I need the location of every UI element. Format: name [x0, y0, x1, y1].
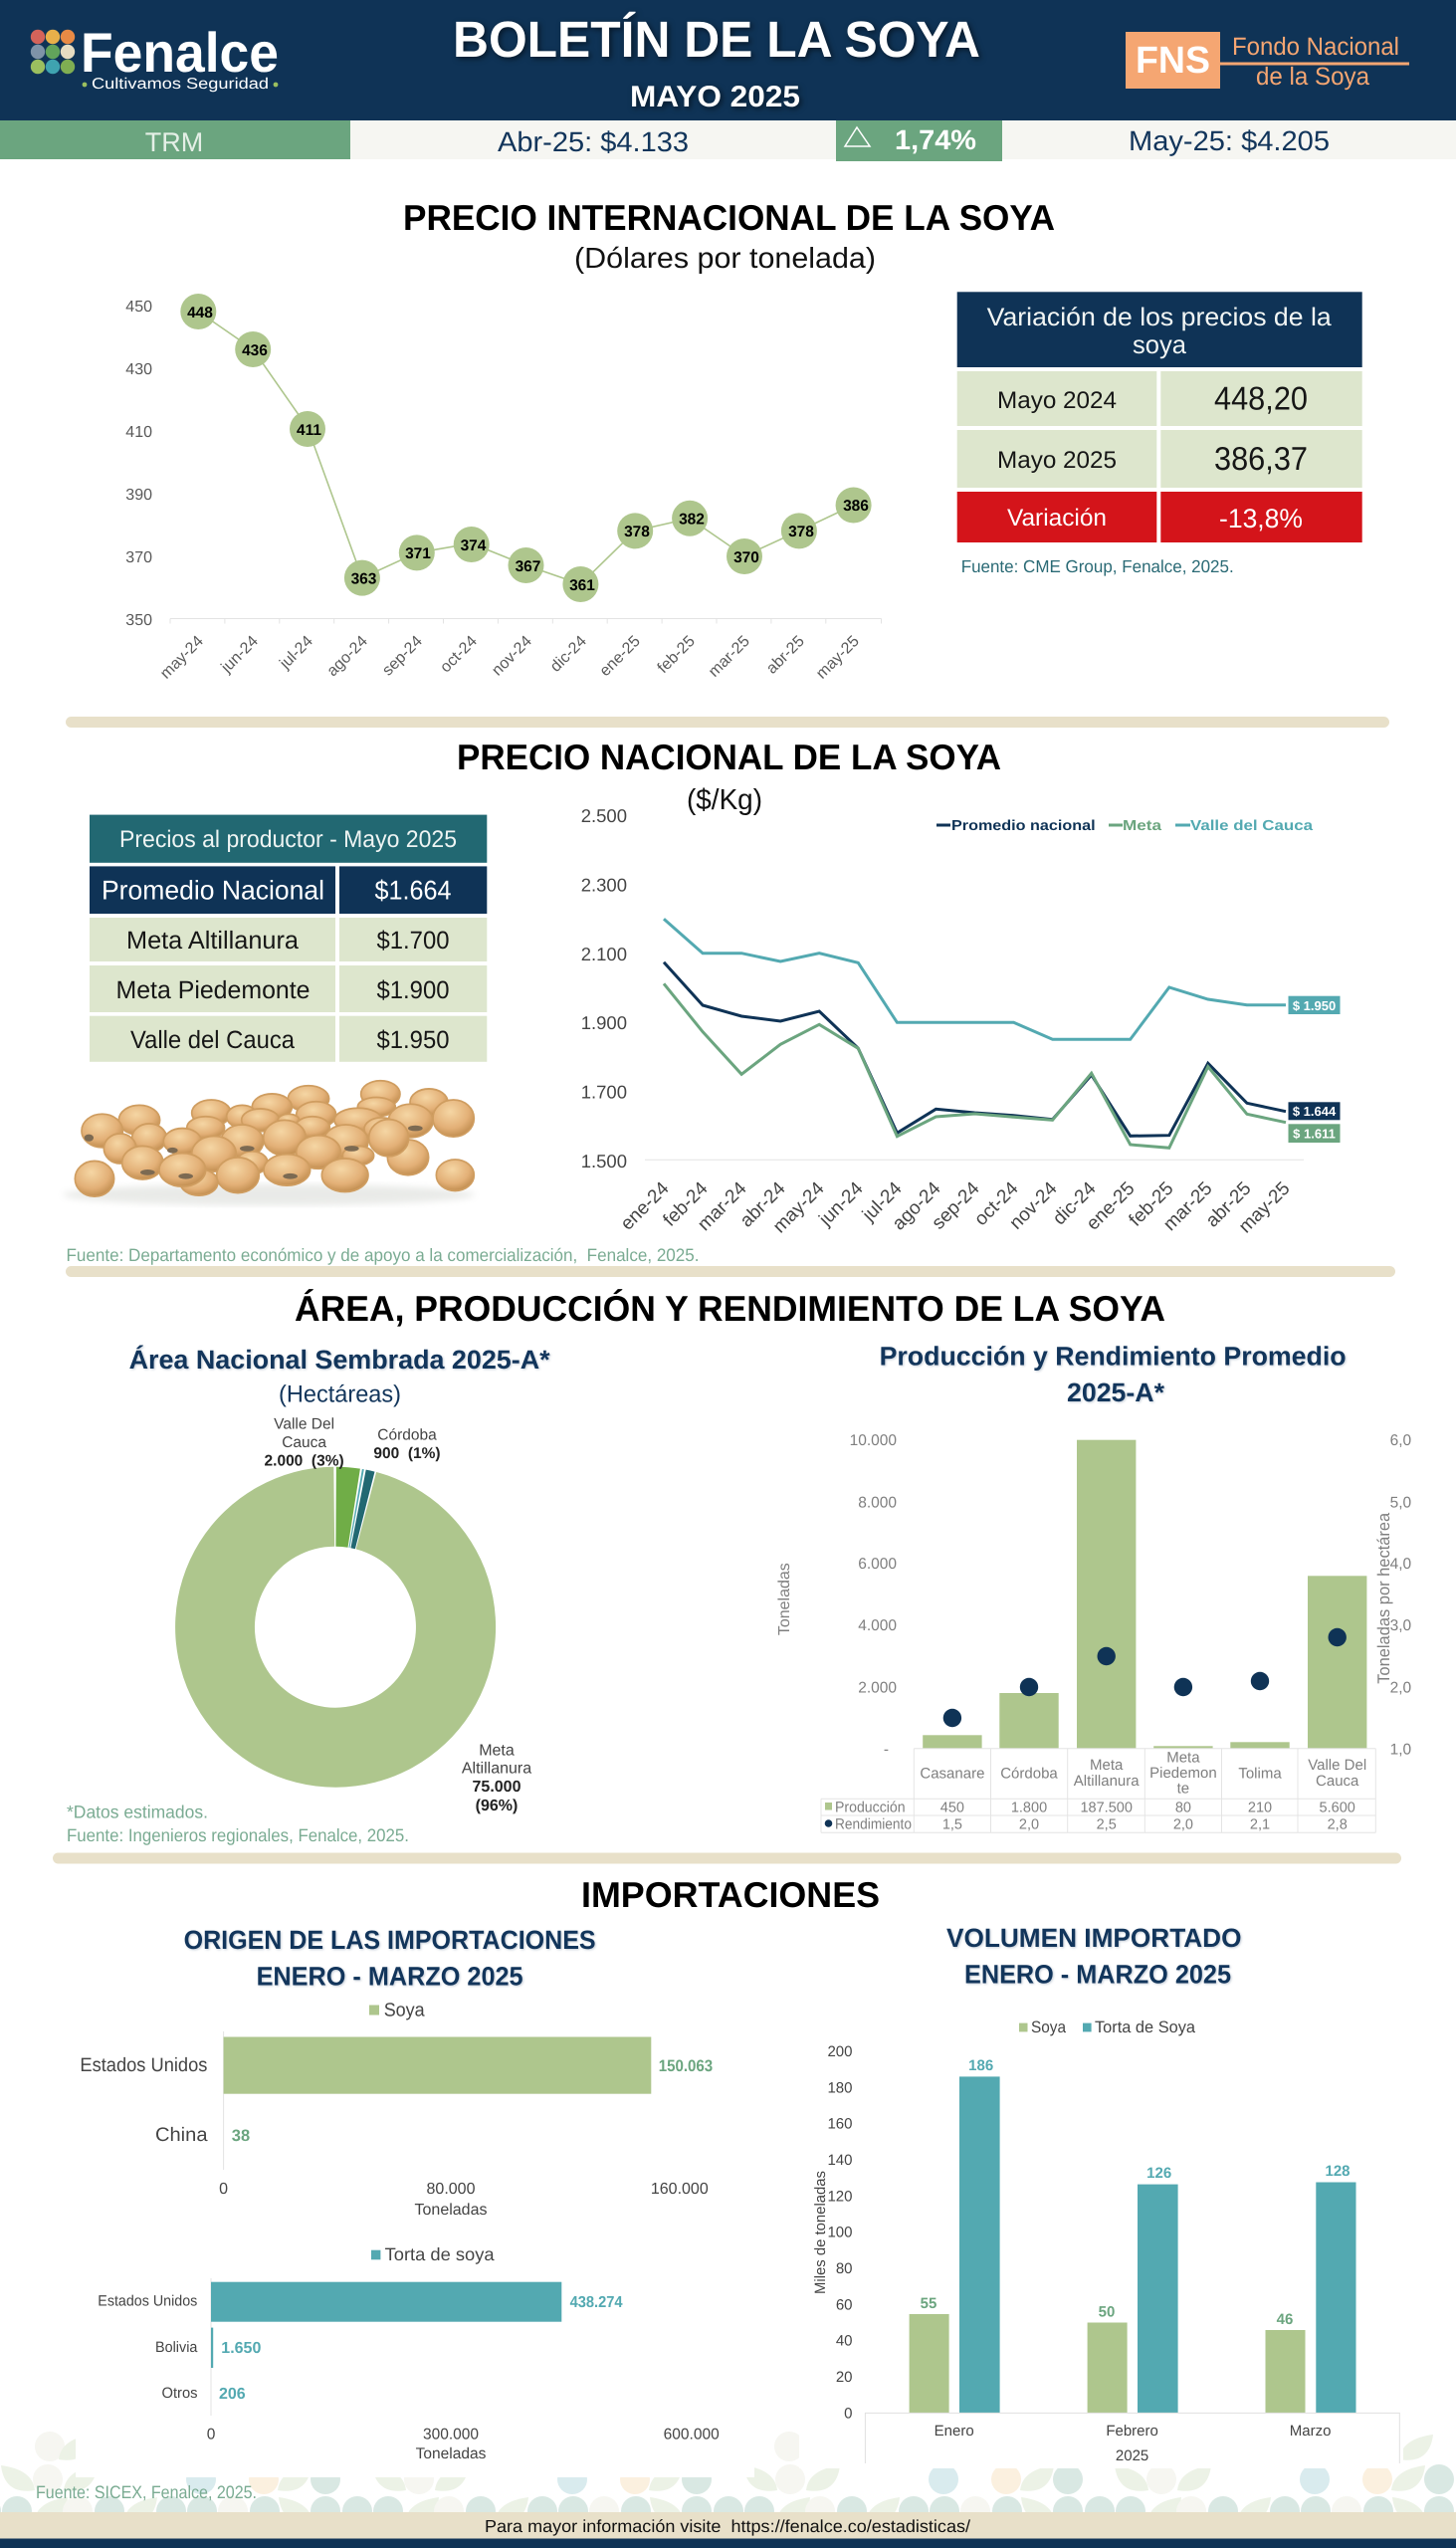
legend: Soya — [1031, 2018, 1067, 2036]
data labels — [187, 305, 869, 594]
heading: planted area: Área Nacional Sembrada 2025-A* — [129, 1345, 550, 1375]
value labels: 46 — [1277, 2311, 1293, 2328]
data table: Meta — [1090, 1757, 1124, 1774]
y axis labels: 180 — [827, 2079, 852, 2096]
value labels: 186 — [968, 2057, 993, 2074]
y axis labels: 350 — [125, 612, 152, 629]
table rows — [997, 380, 1308, 533]
segment: other — [348, 1469, 364, 1548]
series: Promedio nacional — [664, 962, 1286, 1136]
TRM label: TRM — [145, 127, 203, 157]
category labels: Marzo — [1290, 2423, 1331, 2440]
heading: production and yield — [880, 1342, 1347, 1407]
y axis labels: 200 — [827, 2043, 852, 2060]
x axis labels: abr-25 — [763, 633, 808, 678]
segment: Cordoba — [350, 1470, 374, 1549]
category labels: Bolivia — [155, 2339, 198, 2356]
category labels: Otros — [161, 2385, 197, 2402]
logo: Fenalce — [31, 21, 279, 93]
source: department: Fuente: Departamento económico y de apoyo a la comercialización, Fenalce, 2025. — [66, 1245, 699, 1265]
data table: 210 — [1248, 1800, 1272, 1815]
line chart: international price — [125, 294, 882, 683]
y axis labels: 430 — [125, 361, 152, 378]
x axis labels: jul-24 — [858, 1177, 907, 1226]
bar: Bolivia — [211, 2328, 213, 2368]
axis labels: Toneladas — [416, 2445, 487, 2462]
axis labels: 300.000 — [423, 2427, 479, 2442]
table: producer prices — [90, 815, 487, 1062]
axis labels: 160.000 — [651, 2181, 709, 2198]
regional rows — [115, 927, 450, 1054]
value tag: Valle del Cauca: $ 1.950 — [1293, 998, 1336, 1013]
value tag: promedio: $ 1.644 — [1293, 1104, 1337, 1119]
y axis labels: 2.100 — [581, 944, 627, 964]
data table: 2,0 — [1019, 1817, 1039, 1833]
axis labels: 80.000 — [427, 2181, 476, 2198]
table: price variation — [957, 292, 1362, 542]
table rows: Variación — [1007, 505, 1107, 531]
x axis labels: ago-24 — [889, 1177, 945, 1234]
value labels: 150.063 — [659, 2057, 713, 2075]
y axis labels: 20 — [836, 2369, 852, 2386]
data labels: 371 — [405, 545, 431, 562]
right axis labels: 4,0 — [1390, 1556, 1412, 1573]
notes: estimated data and source — [67, 1802, 409, 1845]
x axis labels: nov-24 — [489, 633, 535, 679]
axis labels: 0 — [219, 2181, 228, 2198]
legend: Soya — [384, 2000, 425, 2020]
table rows: 448,20 — [1214, 380, 1308, 417]
y axis labels: 0 — [844, 2405, 852, 2423]
data labels: 382 — [679, 512, 705, 528]
x axis labels: jul-24 — [276, 633, 316, 673]
TRM band — [0, 120, 1456, 161]
y axis labels: 410 — [125, 424, 152, 441]
data table: 1,5 — [942, 1817, 962, 1833]
left axis labels — [850, 1432, 897, 1758]
data table: 2,5 — [1097, 1817, 1117, 1833]
x axis labels: abr-25 — [1202, 1178, 1256, 1231]
table header — [987, 304, 1333, 359]
data labels: 363 — [351, 571, 377, 587]
bar chart: soya origin — [80, 2000, 713, 2219]
table header: Precios al productor - Mayo 2025 — [119, 826, 457, 853]
right axis labels: 2,0 — [1390, 1680, 1412, 1696]
legend — [1019, 2018, 1196, 2036]
y axis labels: 160 — [827, 2116, 852, 2133]
header band — [0, 0, 1456, 120]
regional rows: Meta Piedemonte — [115, 976, 311, 1004]
logo: FNS — [1126, 32, 1409, 91]
label: Cordoba: Córdoba — [377, 1427, 437, 1444]
left axis labels: 8.000 — [858, 1495, 897, 1511]
data table: 80 — [1175, 1800, 1191, 1815]
left axis labels: 6.000 — [858, 1556, 897, 1573]
x axis labels: mar-25 — [706, 633, 753, 681]
x axis labels: dic-24 — [547, 633, 590, 676]
table rows: 386,37 — [1214, 440, 1308, 477]
subheading: units: (Dólares por tonelada) — [574, 243, 876, 275]
series: Valle del Cauca — [664, 919, 1286, 1039]
axis title: tons per hectare: Toneladas por hectárea — [1374, 1512, 1393, 1684]
value labels: 50 — [1099, 2304, 1115, 2321]
y axis labels: 370 — [125, 549, 152, 566]
value labels: 38 — [232, 2127, 250, 2145]
axis labels — [207, 2427, 720, 2462]
data table: 450 — [940, 1800, 964, 1815]
subheading: hectares: (Hectáreas) — [279, 1381, 401, 1408]
heading: area, production and yield: ÁREA, PRODUCCIÓN Y RENDIMIENTO DE LA SOYA — [295, 1288, 1165, 1329]
value labels: 126 — [1146, 2165, 1171, 2182]
data labels: 386 — [843, 498, 869, 515]
logo: Fenalce: Cultivamos Seguridad — [92, 76, 269, 93]
table rows: Mayo 2024 — [997, 387, 1117, 414]
heading: imported volume: VOLUMEN IMPORTADO — [946, 1923, 1242, 1953]
notes: estimated data and source: Fuente: Ingenieros regionales, Fenalce, 2025. — [67, 1825, 409, 1845]
heading: national price: PRECIO NACIONAL DE LA SOYA — [457, 737, 1001, 777]
x axis labels: mar-24 — [694, 1177, 751, 1235]
value tag: promedio — [1288, 1102, 1340, 1120]
data table: Casanare — [920, 1766, 984, 1783]
table rows: -13,8% — [1219, 504, 1303, 533]
y axis labels: 450 — [125, 299, 152, 316]
y axis labels — [125, 299, 152, 629]
subtitle: date: MAYO 2025 — [630, 81, 800, 113]
heading: production and yield: 2025-A* — [1067, 1378, 1165, 1407]
category labels — [98, 2293, 198, 2402]
y axis labels: 80 — [836, 2260, 852, 2277]
legend: Meta — [1123, 818, 1162, 834]
data table: Valle Del — [1308, 1757, 1366, 1774]
category labels: Febrero — [1106, 2423, 1158, 2440]
data table: 187.500 — [1080, 1800, 1133, 1815]
category labels: Enero — [935, 2423, 974, 2440]
label: Meta Altillanura: (96%) — [476, 1798, 518, 1814]
axis title: Miles de toneladas — [812, 2171, 829, 2294]
x axis labels: nov-24 — [1006, 1177, 1062, 1234]
source: CME: Fuente: CME Group, Fenalce, 2025. — [961, 556, 1234, 576]
axis labels: 600.000 — [664, 2427, 720, 2442]
data labels: 367 — [516, 558, 540, 575]
data table: Altillanura — [1074, 1773, 1140, 1790]
heading: imported volume: ENERO - MARZO 2025 — [964, 1960, 1231, 1990]
bar: Estados Unidos — [211, 2282, 561, 2322]
value tag: Meta — [1288, 1124, 1340, 1143]
value tag: Meta: $ 1.611 — [1293, 1127, 1336, 1141]
label: Meta Altillanura: Altillanura — [462, 1761, 531, 1778]
data table: te — [1177, 1781, 1189, 1798]
data table: Córdoba — [1000, 1766, 1058, 1783]
y axis labels: 1.700 — [581, 1082, 627, 1103]
table header: Variación de los precios de la — [987, 304, 1333, 331]
axis labels: Toneladas — [415, 2202, 487, 2219]
heading: imported volume — [946, 1923, 1242, 1990]
regional rows: Valle del Cauca — [130, 1026, 295, 1054]
y axis labels — [827, 2043, 852, 2423]
heading: international price: PRECIO INTERNACIONAL DE LA SOYA — [403, 197, 1055, 238]
x axis labels — [157, 633, 863, 683]
data table: Rendimiento — [835, 1815, 912, 1833]
y axis labels: 60 — [836, 2296, 852, 2313]
data table: Cauca — [1316, 1773, 1359, 1790]
column chart: imported volume — [812, 2018, 1399, 2464]
label: Meta Altillanura: Meta — [479, 1743, 515, 1760]
heading: import origin — [184, 1925, 596, 1992]
data table: Tolima — [1238, 1766, 1282, 1783]
heading: production and yield: Producción y Rendimiento Promedio — [880, 1342, 1347, 1372]
x axis labels: sep-24 — [379, 633, 426, 679]
series: Meta — [664, 983, 1286, 1148]
y axis labels: 140 — [827, 2152, 852, 2169]
data labels: 378 — [624, 524, 650, 540]
category labels: Estados Unidos — [80, 2054, 208, 2076]
x axis labels: feb-25 — [655, 633, 699, 677]
heading: imports: IMPORTACIONES — [581, 1874, 880, 1915]
table rows: Mayo 2025 — [997, 447, 1117, 474]
value labels: 128 — [1325, 2163, 1351, 2180]
value tag: Valle del Cauca — [1288, 996, 1340, 1014]
data table: 2,0 — [1173, 1817, 1193, 1833]
bar: Estados Unidos — [224, 2036, 651, 2094]
category labels: 2025 — [1116, 2447, 1148, 2464]
axis labels: 0 — [207, 2427, 216, 2442]
legend: Torta de Soya — [1095, 2018, 1196, 2036]
logo: FNS: FNS — [1136, 40, 1210, 82]
footer band — [0, 2512, 1456, 2548]
label: Cordoba: 900 (1%) — [373, 1445, 441, 1462]
notes: estimated data and source: *Datos estimados. — [67, 1802, 208, 1821]
data labels: 361 — [569, 577, 595, 594]
x axis labels: jun-24 — [218, 633, 262, 677]
label: Meta Altillanura — [462, 1743, 531, 1814]
right axis labels: 3,0 — [1390, 1617, 1412, 1634]
bars: torta de soya — [959, 2076, 1355, 2413]
legend: Valle del Cauca — [1190, 818, 1314, 834]
x axis labels: abr-24 — [736, 1177, 790, 1231]
logo: FNS: Fondo Nacional — [1232, 33, 1399, 61]
regional rows: $1.900 — [376, 976, 450, 1004]
label: Valle del Cauca: Valle Del — [274, 1415, 334, 1432]
x axis labels: may-24 — [157, 633, 207, 683]
right axis labels — [1390, 1432, 1412, 1758]
regional rows: $1.950 — [376, 1026, 450, 1054]
table header: soya — [1133, 331, 1187, 359]
legend: Promedio nacional — [951, 818, 1096, 834]
x axis labels: mar-25 — [1159, 1178, 1217, 1235]
value labels: 1.650 — [221, 2340, 261, 2357]
category labels — [935, 2423, 1331, 2464]
x axis labels: ago-24 — [324, 633, 371, 680]
data table: Producción — [835, 1800, 906, 1815]
national average row: $1.664 — [374, 876, 452, 906]
x axis labels: sep-24 — [929, 1177, 984, 1234]
left axis labels: 2.000 — [858, 1680, 897, 1696]
x axis labels: feb-25 — [1126, 1178, 1178, 1231]
right axis labels: 1,0 — [1390, 1742, 1412, 1758]
right axis labels: 5,0 — [1390, 1495, 1412, 1511]
y axis labels: 390 — [125, 487, 152, 504]
x axis labels: ene-25 — [1083, 1178, 1140, 1234]
label: Meta Altillanura: 75.000 — [473, 1779, 521, 1796]
x axis labels: jun-24 — [815, 1177, 868, 1231]
legend: Torta de soya — [385, 2244, 496, 2264]
x axis labels — [617, 1177, 1295, 1237]
x axis labels: feb-24 — [660, 1177, 713, 1231]
data table: Piedemon — [1149, 1765, 1217, 1782]
subheading: units: ($/Kg) — [687, 784, 762, 816]
data labels: 411 — [297, 422, 321, 439]
source: SICEX: Fuente: SICEX, Fenalce, 2025. — [36, 2482, 257, 2502]
axis title: tons: Toneladas — [776, 1563, 793, 1635]
category labels: Estados Unidos — [98, 2293, 197, 2310]
label: Valle del Cauca: Cauca — [282, 1434, 326, 1451]
bar chart: soybean meal origin — [98, 2244, 720, 2462]
y axis labels: 120 — [827, 2188, 852, 2205]
value labels — [921, 2057, 1351, 2328]
x axis labels: ene-25 — [597, 633, 644, 680]
label: Valle del Cauca: 2.000 (3%) — [265, 1453, 344, 1470]
right axis labels: 6,0 — [1390, 1432, 1412, 1449]
value labels: 438.274 — [570, 2294, 623, 2311]
footer link text: Para mayor información visite https://fenalce.co/estadisticas/ — [485, 2516, 970, 2536]
x axis labels: may-25 — [1235, 1178, 1295, 1237]
combo chart: production and yield — [776, 1432, 1412, 1833]
category labels — [80, 2054, 208, 2146]
value labels: 206 — [219, 2386, 246, 2403]
data labels: 448 — [187, 305, 213, 321]
x axis labels: may-25 — [813, 633, 863, 683]
y axis labels: 1.500 — [581, 1151, 627, 1171]
x axis labels: oct-24 — [970, 1177, 1023, 1230]
donut chart: planted area — [175, 1415, 531, 1814]
data table: 2,8 — [1328, 1817, 1348, 1833]
axis labels — [219, 2181, 709, 2219]
data table: 5.600 — [1320, 1800, 1355, 1815]
y axis labels: 100 — [827, 2225, 852, 2241]
data table: 2,1 — [1250, 1817, 1270, 1833]
value labels — [219, 2294, 623, 2403]
bars: production — [923, 1440, 1366, 1749]
segment: Valle del Cauca — [335, 1467, 360, 1548]
y axis labels: 1.900 — [581, 1012, 627, 1033]
data labels: 374 — [461, 537, 487, 554]
x axis labels: dic-24 — [1049, 1177, 1101, 1229]
illustration: soybeans — [63, 1081, 475, 1205]
line chart: national price — [581, 805, 1340, 1237]
category labels: China — [155, 2124, 208, 2146]
data points — [180, 294, 872, 602]
y axis labels: 2.300 — [581, 875, 627, 896]
national average row: Promedio Nacional — [102, 876, 324, 906]
national average row — [102, 876, 452, 906]
value labels: 55 — [921, 2295, 936, 2312]
logo: Fenalce: Fenalce — [81, 21, 279, 84]
x axis labels: ene-24 — [617, 1177, 674, 1234]
icon: triangle up — [845, 127, 870, 146]
bars: soya — [910, 2314, 1306, 2413]
x axis labels: may-24 — [769, 1177, 829, 1237]
left axis labels: 4.000 — [858, 1617, 897, 1634]
label: Cordoba — [373, 1427, 441, 1462]
points: yield — [943, 1628, 1347, 1727]
left axis labels: - — [884, 1742, 889, 1758]
y axis labels: 2.500 — [581, 805, 627, 826]
segment: Meta Altillanura — [175, 1467, 496, 1788]
logo: FNS: de la Soya — [1256, 63, 1369, 91]
data table — [821, 1749, 1375, 1833]
value labels — [232, 2057, 713, 2145]
data labels: 370 — [733, 549, 759, 566]
data labels: 436 — [242, 342, 268, 359]
data labels: 378 — [788, 524, 814, 540]
heading: import origin: ENERO - MARZO 2025 — [257, 1962, 523, 1992]
regional rows: $1.700 — [376, 927, 450, 955]
left axis labels: 10.000 — [850, 1432, 897, 1449]
heading: import origin: ORIGEN DE LAS IMPORTACIONES — [184, 1925, 596, 1955]
data table: 1.800 — [1011, 1800, 1047, 1815]
title: BOLETÍN DE LA SOYA — [453, 11, 980, 68]
y axis labels: 40 — [836, 2333, 852, 2350]
May value: May-25: $4.205 — [1129, 125, 1330, 156]
footer background pattern — [0, 2349, 1456, 2526]
x axis labels: oct-24 — [437, 633, 481, 676]
data table: Meta — [1166, 1750, 1200, 1767]
legend — [936, 818, 1314, 834]
TRM variation: 1,74% — [895, 124, 976, 155]
y axis labels — [581, 805, 627, 1171]
regional rows: Meta Altillanura — [126, 927, 299, 955]
April value: Abr-25: $4.133 — [498, 126, 689, 157]
label: Valle del Cauca — [265, 1415, 344, 1470]
